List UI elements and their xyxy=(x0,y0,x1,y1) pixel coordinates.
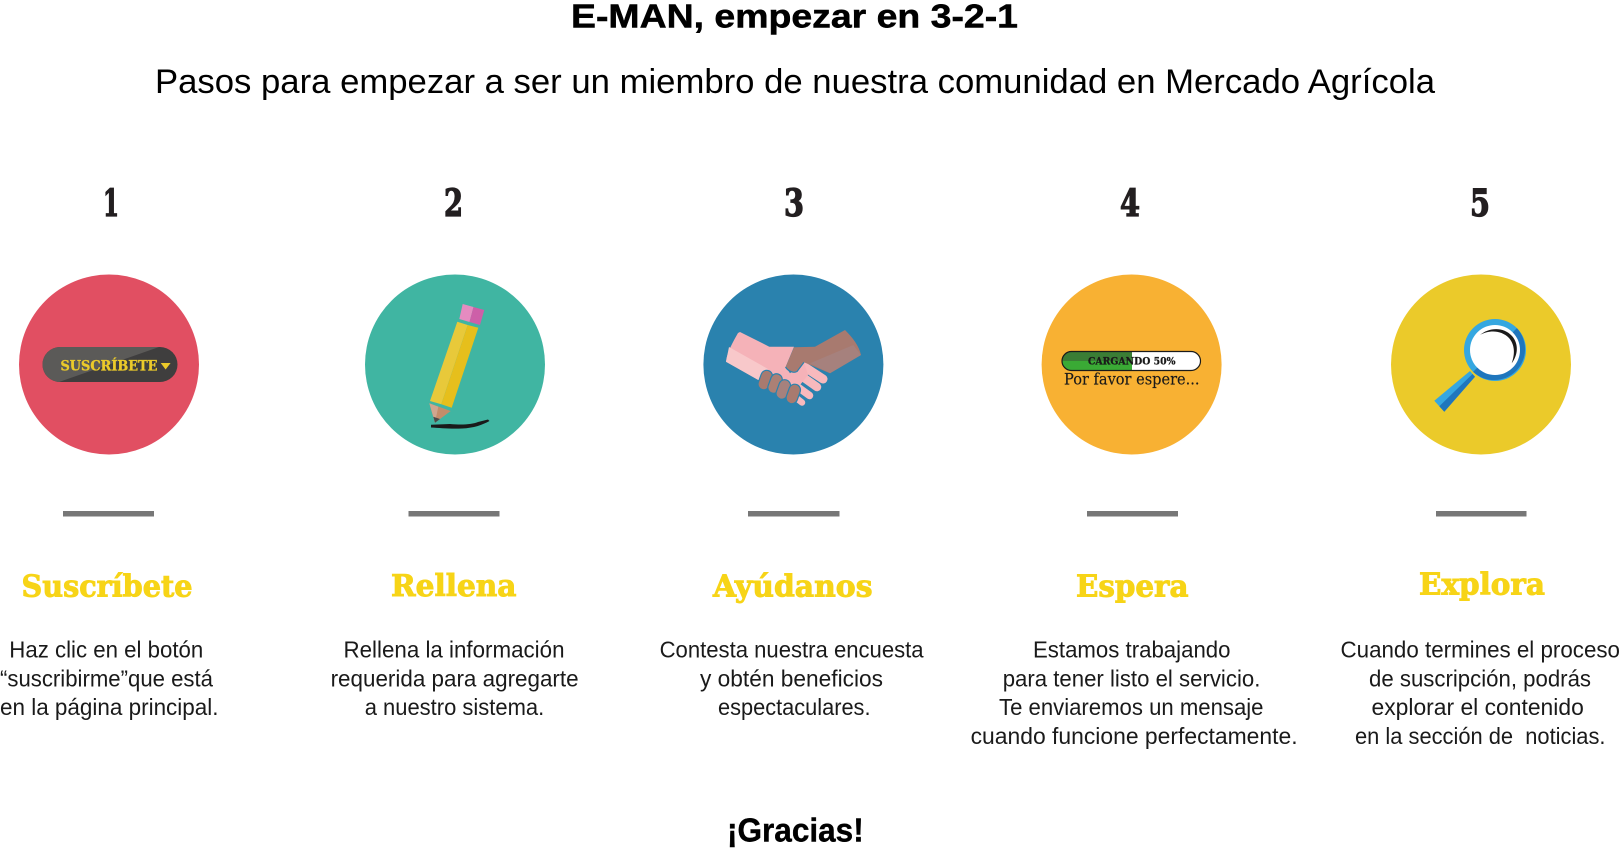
yellow circle xyxy=(1391,274,1571,454)
description: y obtén beneficios xyxy=(700,666,883,692)
description xyxy=(971,636,1298,749)
description: cuando funcione perfectamente. xyxy=(971,723,1298,749)
divider bar xyxy=(63,511,154,516)
divider bar xyxy=(748,511,840,516)
description: a nuestro sistema. xyxy=(365,694,544,720)
description: Te enviaremos un mensaje xyxy=(999,694,1264,720)
red circle xyxy=(19,274,199,454)
step number 2: 2 xyxy=(444,181,463,225)
description: explorar el contenido xyxy=(1372,694,1584,720)
step 1: Suscríbete xyxy=(0,181,218,720)
description xyxy=(1340,636,1620,749)
heading: Explora xyxy=(1419,567,1545,602)
heading: Rellena xyxy=(391,568,516,603)
description: Cuando termines el proceso xyxy=(1340,636,1620,662)
description: Estamos trabajando xyxy=(1033,636,1230,662)
icon: pencil xyxy=(429,304,490,429)
description: Haz clic en el botón xyxy=(9,636,203,662)
description: en la sección de noticias. xyxy=(1355,723,1606,749)
pink hand fingers xyxy=(790,364,823,402)
brown fingers xyxy=(756,369,802,405)
description xyxy=(331,636,579,720)
description: para tener listo el servicio. xyxy=(1003,666,1260,692)
divider bar xyxy=(1436,511,1526,516)
teal circle xyxy=(365,274,545,454)
brown hand xyxy=(786,330,861,373)
description: de suscripción, podrás xyxy=(1369,666,1591,692)
step 5: Explora xyxy=(1340,181,1620,749)
step 2: Rellena xyxy=(331,181,579,720)
step number 3: 3 xyxy=(784,181,804,225)
description: Rellena la información xyxy=(344,636,564,662)
orange circle xyxy=(1042,274,1222,454)
pink hand arm and palm xyxy=(726,332,808,398)
heading: Espera xyxy=(1076,568,1188,604)
icon: loading bar: Por favor espere... xyxy=(1064,370,1200,388)
icon: loading bar xyxy=(1062,352,1200,388)
icon: loading bar: CARGANDO 50% xyxy=(1088,356,1176,368)
divider bar xyxy=(1087,511,1178,516)
description: “suscribirme”que está xyxy=(0,666,213,692)
description: en la página principal. xyxy=(0,694,218,720)
step number 4: 4 xyxy=(1120,181,1140,225)
heading: Suscríbete xyxy=(22,568,192,604)
description xyxy=(660,636,924,720)
blue circle xyxy=(703,274,883,454)
divider bar xyxy=(408,511,500,516)
subtitle: Pasos para empezar a ser un miembro de nuestra comunidad en Mercado Agrícola xyxy=(155,63,1435,101)
icon: subscribe button: SUSCRÍBETE xyxy=(60,356,158,374)
icon: subscribe button xyxy=(40,347,178,382)
icon: handshake xyxy=(726,330,861,405)
description: Contesta nuestra encuesta xyxy=(660,636,924,662)
step number 1: 1 xyxy=(103,181,119,225)
step 4: Espera xyxy=(971,181,1298,749)
description: espectaculares. xyxy=(718,694,870,720)
step 3: Ayúdanos xyxy=(660,181,924,720)
heading: Ayúdanos xyxy=(712,568,872,604)
icon: magnifying glass xyxy=(1434,319,1526,412)
description xyxy=(0,636,218,720)
step number 5: 5 xyxy=(1470,181,1490,225)
closing message: ¡Gracias! xyxy=(727,812,864,849)
description: requerida para agregarte xyxy=(331,666,579,692)
